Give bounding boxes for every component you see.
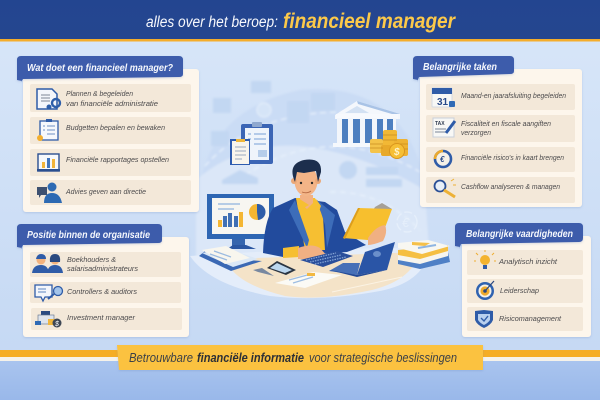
row: leiderschap: Leiderschap	[500, 286, 539, 295]
title	[146, 10, 457, 33]
icon: gold coins	[370, 130, 408, 158]
row: investment: Investment manager	[67, 313, 136, 322]
icon: tax form: TAX	[435, 121, 445, 127]
banner: financiële informatie	[197, 351, 304, 365]
icon: document with gear	[37, 89, 60, 110]
row: rapportages	[30, 149, 191, 176]
title: alles over het beroep:	[146, 14, 278, 31]
header band	[0, 0, 600, 42]
icon: keyboard	[300, 251, 353, 267]
row: budgetten	[30, 117, 191, 144]
panel: Belangrijke vaardigheden	[455, 223, 591, 337]
heading: Wat doet een financieel manager?	[27, 62, 173, 74]
heading: Belangrijke taken	[423, 61, 497, 73]
icon: bank building	[333, 101, 400, 147]
icon: checklist	[37, 119, 58, 141]
footer band	[0, 345, 600, 400]
row: controllers	[30, 282, 181, 303]
icon: report with magnifier	[35, 285, 62, 301]
row: advies	[30, 180, 191, 205]
icon: tax form	[433, 118, 455, 137]
arm and hand	[283, 246, 299, 258]
row: plannen: Plannen & begeleiden	[66, 89, 133, 98]
row: maandafsluiting	[426, 84, 575, 110]
icon: euro cycle: €	[440, 155, 445, 164]
row: investment	[31, 308, 182, 330]
banner: voor strategische beslissingen	[309, 351, 457, 365]
icon: laptop	[329, 242, 395, 277]
row: cashflow: Cashflow analyseren & managen	[461, 182, 560, 191]
icon: office and dollar coin: $	[54, 321, 59, 328]
icon: monitor with charts	[207, 194, 274, 249]
icon: gold coins: $	[393, 147, 400, 158]
row: plannen: van financiële administratie	[66, 99, 158, 108]
row: analytisch: Analytisch inzicht	[498, 257, 558, 266]
row: risicomanagement: Risicomanagement	[499, 314, 562, 323]
icon: document on desk	[275, 272, 342, 288]
row: fiscaliteit: verzorgen	[461, 128, 491, 137]
row: maandafsluiting: Maand-en jaarafsluiting begeleiden	[461, 91, 566, 100]
panel: Belangrijke taken	[413, 56, 582, 207]
central illustration	[190, 101, 450, 298]
row: budgetten: Budgetten bepalen en bewaken	[66, 123, 165, 132]
icon: euro cycle	[435, 151, 451, 167]
icon: calendar: 31	[437, 97, 449, 108]
row: advies: Advies geven aan directie	[65, 187, 146, 196]
heading: Belangrijke vaardigheden	[466, 228, 573, 240]
row: rapportages: Financiële rapportages opstellen	[66, 155, 169, 164]
icon: faint euro	[397, 212, 417, 232]
icon: light bulb	[474, 250, 496, 269]
icon: clipboards	[230, 122, 273, 165]
panel: Wat doet een financieel manager	[17, 56, 199, 212]
icon: tablet and papers	[199, 246, 262, 271]
person	[263, 160, 366, 259]
icon: office and dollar coin	[35, 311, 62, 328]
heading: Positie binnen de organisatie	[27, 229, 150, 241]
icon: shield	[475, 310, 493, 328]
icon: calendar	[432, 88, 455, 108]
icon: faint euro: €	[402, 215, 410, 230]
row: controllers: Controllers & auditors	[67, 287, 137, 296]
row: fiscaliteit: Fiscaliteit en fiscale aangiften	[461, 119, 551, 128]
heading	[17, 224, 162, 249]
banner: Betrouwbare	[129, 351, 193, 365]
icon: stack of papers	[398, 240, 450, 269]
row: cashflow	[426, 177, 575, 203]
row: risico: Financiële risico's in kaart brengen	[461, 153, 564, 162]
row: risico	[426, 147, 575, 172]
row: plannen	[30, 84, 191, 112]
row: boekhouders	[30, 252, 181, 277]
heading	[413, 56, 514, 82]
panel: Positie binnen de organisatie	[17, 224, 189, 337]
heading	[17, 56, 183, 82]
row: fiscaliteit	[426, 115, 575, 142]
icon: yellow folder	[343, 203, 392, 245]
desk	[190, 248, 430, 298]
icon: advisor with speech bubble	[37, 182, 62, 203]
icon: magnifier	[434, 179, 456, 197]
title: financieel manager	[283, 10, 457, 33]
icon: bar chart screen	[37, 154, 60, 172]
icon: two people	[32, 254, 63, 273]
banner	[117, 345, 483, 370]
row: boekhouders: salarisadministrateurs	[67, 264, 138, 273]
row: boekhouders: Boekhouders &	[67, 255, 116, 264]
icon: target	[476, 281, 494, 300]
icon: phone	[253, 261, 296, 276]
